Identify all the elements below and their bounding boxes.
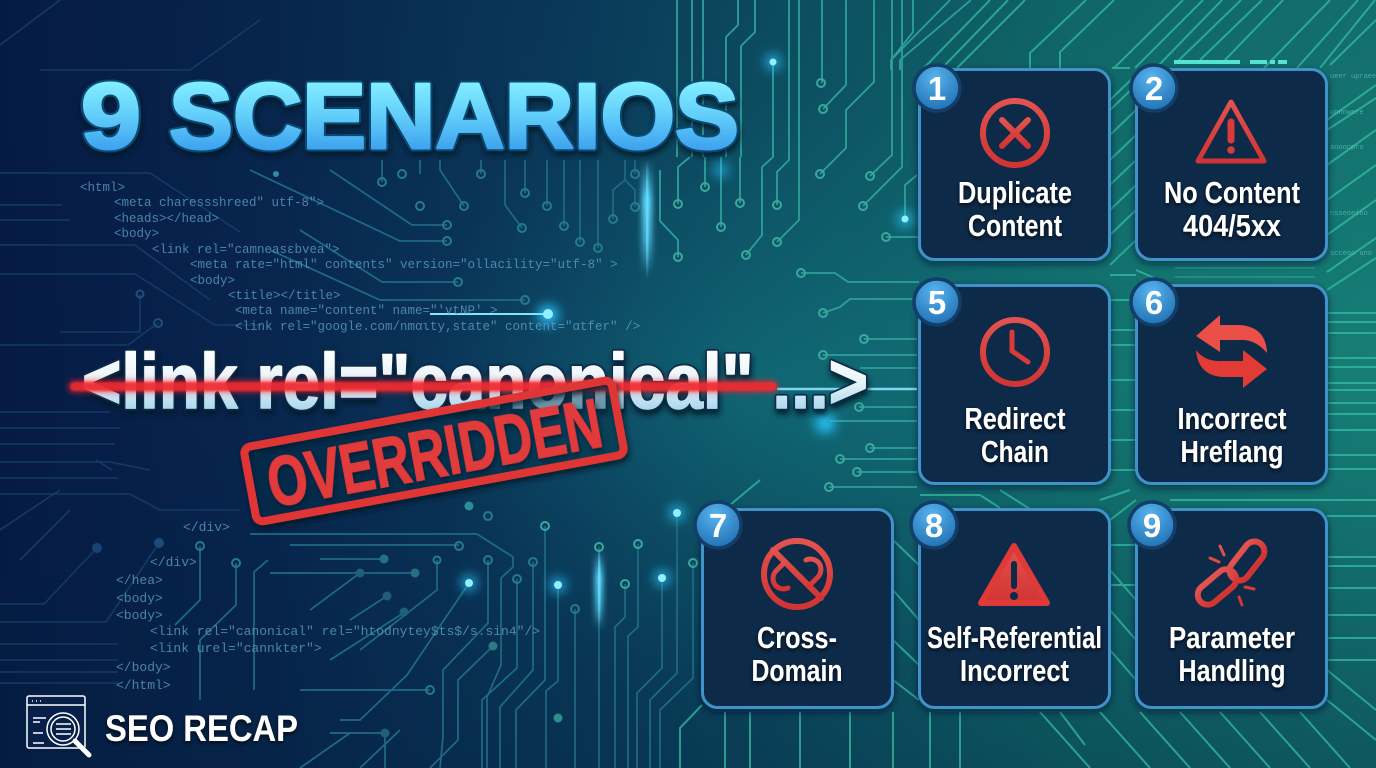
badge 5: [914, 279, 960, 325]
icon: swap arrows: [1196, 315, 1267, 388]
panel: scenario 9: [1129, 502, 1326, 708]
canonical tag text: <link rel="canonical" ...>: [82, 337, 868, 425]
badge 1: 1: [928, 70, 946, 107]
label: Incorrect: [1178, 401, 1286, 436]
label: [752, 620, 842, 688]
icon: browser with magnifier: [27, 696, 89, 755]
badge 9: [1129, 502, 1175, 548]
badge 9: 9: [1143, 507, 1161, 544]
tiny side labels: [1330, 73, 1376, 258]
code block: top: <meta rate="html" contents" version="ollacility="utf-8" >: [190, 258, 618, 272]
label: No Content: [1164, 175, 1300, 210]
tiny side labels: unnnwere: [1330, 109, 1364, 117]
badge 8: 8: [925, 507, 943, 544]
label: Self-Referential: [927, 620, 1102, 655]
code block: top: <html>: [80, 181, 125, 195]
brand name: SEO RECAP: [105, 708, 298, 749]
label: [1169, 620, 1295, 688]
label: [958, 175, 1072, 243]
code block: top: [80, 181, 640, 334]
panel: scenario 7: [695, 502, 892, 708]
badge 8: [911, 502, 957, 548]
panel: scenario 1: [914, 65, 1110, 260]
label: Redirect: [964, 401, 1066, 436]
icon: clock: [983, 320, 1047, 384]
label: Cross-: [757, 620, 837, 655]
code block: top: <link rel="google.com/nmαιty,state" content="αtfer" />: [235, 320, 640, 334]
title: SCENARIOS: [169, 64, 739, 168]
code block: bottom: </div>: [183, 520, 230, 535]
tiny side labels: nsseoeino: [1330, 210, 1368, 218]
panel: scenario 2: [1131, 65, 1326, 260]
badge 2: [1131, 65, 1177, 111]
label: [927, 620, 1102, 688]
badge 2: 2: [1145, 70, 1163, 107]
code block: bottom: </body>: [116, 660, 171, 675]
code block: bottom: <link rel="canonical" rel="htodnytey$ts$/s.sin4"/>: [150, 624, 540, 639]
code block: bottom: </hea>: [116, 573, 163, 588]
label: Content: [968, 208, 1062, 243]
label: 404/5xx: [1183, 208, 1282, 243]
label: Incorrect: [960, 653, 1069, 688]
label: [964, 401, 1066, 469]
code block: top: <meta name="content" name="'vtNP' >: [235, 304, 498, 318]
canonical tag text: <link rel="canonical" ...>: [82, 337, 868, 425]
label: [1178, 401, 1286, 469]
badge 6: [1131, 279, 1177, 325]
badge 6: 6: [1145, 284, 1163, 321]
label: [1164, 175, 1300, 243]
logo: SEO RECAP: [27, 696, 298, 755]
badge 7: [695, 502, 741, 548]
title: 9: [81, 64, 141, 168]
panel: scenario 5: [914, 279, 1110, 484]
label: Hreflang: [1180, 434, 1284, 469]
code block: bottom: <body>: [116, 591, 163, 606]
panel: scenario 6: [1131, 279, 1326, 484]
badge 5: 5: [928, 284, 946, 321]
icon: filled warning: [981, 546, 1047, 603]
code block: top: <link rel="camneasεbvea">: [152, 243, 340, 257]
badge 7: 7: [709, 507, 727, 544]
label: Domain: [752, 653, 842, 688]
code block: bottom: [116, 520, 540, 693]
glowing nodes: [273, 55, 917, 630]
title: SCENARIOS: [169, 64, 739, 168]
red strikethrough: [68, 380, 778, 393]
code block: bottom: </html>: [116, 678, 171, 693]
overridden stamp: [243, 380, 625, 525]
label: Parameter: [1169, 620, 1295, 655]
code block: top: <meta charessshreed" utf-8">: [114, 196, 324, 210]
title: 9: [81, 64, 141, 168]
icon: warning outline: [1198, 102, 1264, 161]
overridden stamp: OVERRIDDEN: [261, 384, 608, 522]
label: Chain: [981, 434, 1049, 469]
code block: top: <title></title>: [228, 289, 341, 303]
badge 1: [914, 65, 960, 111]
code block: bottom: <body>: [116, 608, 163, 623]
code block: top: <body>: [190, 274, 235, 288]
code block: top: <body>: [114, 227, 159, 241]
code block: top: <heads></head>: [114, 212, 219, 226]
panel: scenario 8: [911, 502, 1110, 708]
tiny side labels: anoonpro: [1330, 144, 1364, 152]
label: Handling: [1178, 653, 1286, 688]
icon: circled x: [983, 101, 1047, 165]
label: Duplicate: [958, 175, 1072, 210]
tiny side labels: scceoo uno: [1330, 250, 1372, 258]
code block: bottom: </div>: [150, 555, 197, 570]
icon: prohibited link: [764, 541, 830, 607]
code block: bottom: <link urel="cannkter">: [150, 641, 322, 656]
icon: broken link: [1194, 538, 1268, 609]
